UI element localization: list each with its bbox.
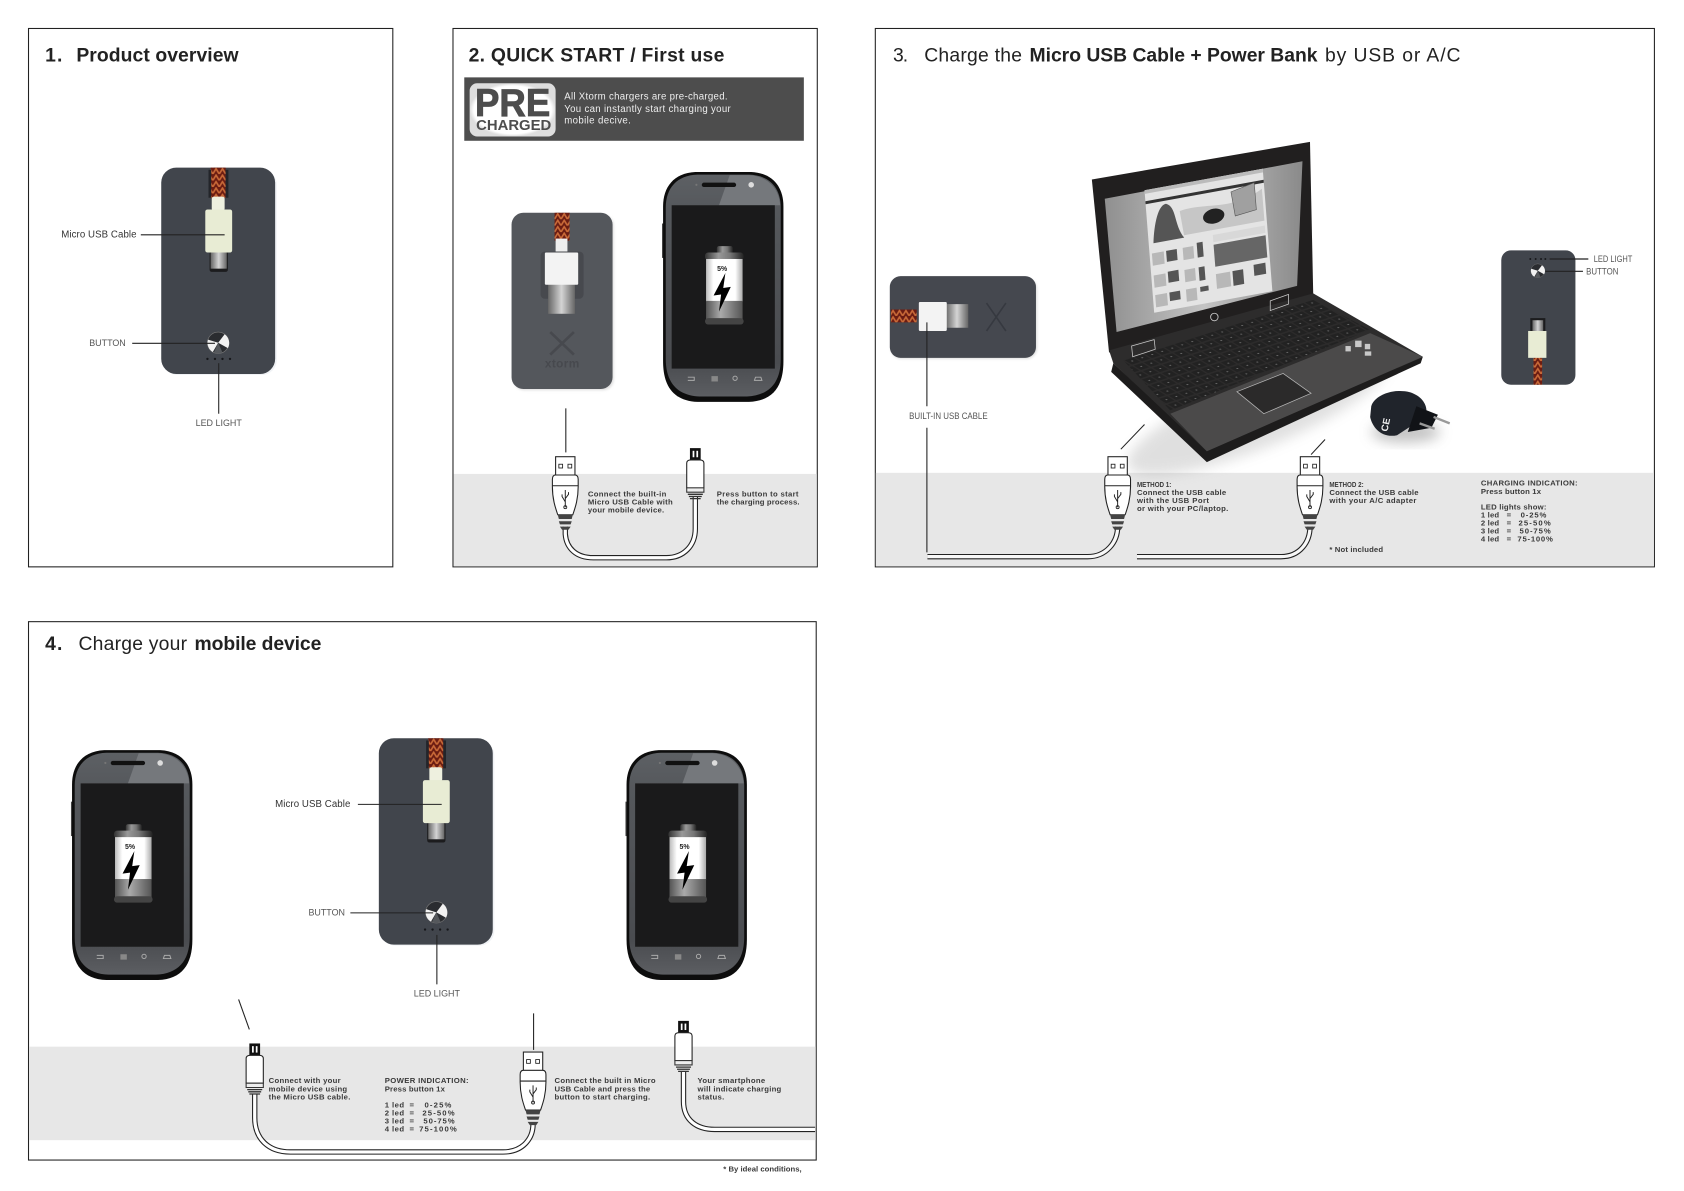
step text: smartphone status: status.	[697, 1092, 724, 1101]
text: power indication: =	[409, 1108, 414, 1117]
grey instruction band	[454, 474, 817, 566]
panel 4: charge your mobile device	[29, 622, 816, 1160]
banner text: You can instantly start charging your	[564, 104, 732, 115]
text: power indication: 75-100%	[419, 1125, 457, 1134]
badge: pre charged: PRE	[475, 82, 550, 125]
power bank front view	[161, 168, 277, 375]
heading: charge by USB or AC: Micro USB Cable + Power Bank	[1030, 44, 1318, 66]
label: button: BUTTON	[89, 338, 126, 348]
smartphone with battery screen: 5%	[717, 266, 728, 273]
step text: press button: Press button to start	[717, 489, 799, 498]
label: micro USB cable: Micro USB Cable	[275, 799, 350, 810]
heading: charge your mobile device	[45, 633, 322, 655]
text: power indication: 0-25%	[425, 1100, 452, 1109]
leader lines to connectors	[1121, 424, 1325, 455]
text: charging indication: 75-100%	[1517, 535, 1553, 544]
grey instruction band	[876, 473, 1654, 566]
label: button: BUTTON	[308, 908, 345, 918]
text: charging indication: 0-25%	[1521, 510, 1547, 519]
heading: charge your mobile device: Charge your	[78, 633, 188, 655]
smartphone, left: 5%	[125, 844, 136, 851]
label: LED light	[414, 935, 460, 999]
panel 2: quick start	[453, 28, 817, 567]
step text: connect with device	[269, 1076, 350, 1101]
cable between micro and USB-A connectors	[246, 1043, 546, 1152]
text: charging indication: 3 led	[1481, 527, 1499, 536]
text: method 1: with the USB Port	[1136, 496, 1209, 505]
text: charging indication: 25-50%	[1518, 518, 1551, 527]
text: charging indication: CHARGING INDICATION:	[1481, 479, 1578, 488]
text: power indication: 2 led	[385, 1108, 404, 1117]
text: method 2	[1328, 480, 1419, 505]
label: button	[308, 908, 433, 918]
step text: smartphone status: Your smartphone	[697, 1076, 766, 1085]
text: power indication	[385, 1076, 469, 1134]
text: charging indication	[1481, 479, 1578, 544]
text: method 2: with your A/C adapter	[1328, 496, 1416, 505]
text: charging indication: =	[1507, 510, 1512, 519]
smartphone with battery screen	[662, 172, 783, 402]
smartphone, left	[71, 750, 192, 980]
leader line to USB connector	[565, 408, 567, 452]
text: power indication: =	[409, 1100, 414, 1109]
heading: charge by USB or AC: Charge the	[924, 44, 1022, 66]
step text: connect: Micro USB Cable with	[588, 498, 673, 507]
text: power indication: 50-75%	[423, 1117, 455, 1126]
label: button (right): BUTTON	[1586, 267, 1618, 277]
heading: charge by USB or AC: by USB or A/C	[1325, 44, 1460, 66]
step text: connect built-in cable: Connect the built in Micro	[555, 1076, 656, 1085]
step text: smartphone status	[696, 1076, 782, 1101]
step text: connect with device: the Micro USB cable.	[269, 1092, 350, 1101]
label: built-in USB cable: BUILT-IN USB CABLE	[909, 411, 988, 421]
banner text	[564, 91, 732, 127]
heading: product overview: 1.	[45, 44, 62, 66]
text: charging indication: 4 led	[1481, 535, 1499, 544]
panel 1: product overview	[29, 28, 393, 567]
heading: charge by USB or AC: 3.	[893, 44, 908, 66]
text: charging indication: LED lights show:	[1481, 502, 1546, 511]
text: power indication: =	[409, 1117, 414, 1126]
banner text: All Xtorm chargers are pre-charged.	[564, 91, 728, 102]
step text: connect with device: Connect with your	[269, 1076, 341, 1085]
smartphone, right: 5%	[680, 844, 690, 851]
power bank, horizontal	[890, 276, 1037, 359]
text: method 2: METHOD 2:	[1329, 480, 1364, 489]
step text: connect: your mobile device.	[588, 506, 664, 515]
step text: press button	[717, 489, 800, 507]
step text: connect built-in cable: USB Cable and press the	[555, 1084, 651, 1093]
text: charging indication: Press button 1x	[1481, 487, 1542, 496]
heading: charge by USB or AC	[893, 44, 1460, 66]
text: power indication: 4 led	[385, 1125, 404, 1134]
grey instruction band	[29, 1047, 816, 1140]
step text: connect	[588, 489, 673, 515]
step text: connect with device: mobile device using	[269, 1084, 347, 1093]
heading: product overview: Product overview	[76, 44, 240, 66]
panel 3: charge the power bank	[875, 28, 1654, 567]
power bank, rear view	[1501, 250, 1575, 385]
power bank front view	[379, 738, 494, 946]
step text: smartphone status: will indicate charging	[696, 1084, 782, 1093]
text: power indication: POWER INDICATION:	[385, 1076, 469, 1085]
label: LED light: LED LIGHT	[196, 418, 242, 428]
label: button (right)	[1545, 267, 1618, 277]
laptop	[1092, 142, 1423, 498]
label: micro USB cable: Micro USB Cable	[61, 229, 137, 240]
text: charging indication: 1 led	[1481, 510, 1499, 519]
label: LED light: LED LIGHT	[414, 989, 460, 999]
footnote: * By ideal conditions,	[723, 1164, 802, 1173]
USB cable illustration	[552, 448, 704, 558]
label: LED light (right): LED LIGHT	[1594, 254, 1633, 264]
heading: quick start: 2. QUICK START / First use	[469, 44, 725, 66]
text: power indication: 3 led	[385, 1117, 404, 1126]
text: charging indication: =	[1507, 527, 1512, 536]
pre-charged banner	[464, 77, 804, 141]
cable from micro connector to panel edge	[675, 1021, 815, 1129]
text: power indication: Press button 1x	[385, 1084, 446, 1093]
step text: press button: the charging process.	[717, 498, 800, 507]
text: method 1: or with your PC/laptop.	[1137, 504, 1228, 513]
website on laptop screen	[1145, 169, 1272, 313]
badge: pre charged: CHARGED	[476, 118, 551, 134]
heading: charge your mobile device: mobile device	[195, 633, 322, 655]
label: button	[89, 338, 215, 348]
cable: method 2	[1137, 457, 1323, 557]
power bank with USB connector: xtorm	[545, 357, 579, 371]
leader lines to connectors	[239, 999, 534, 1050]
text: power indication: =	[409, 1125, 414, 1134]
step text: connect built-in cable	[555, 1076, 656, 1101]
smartphone, right	[625, 750, 747, 980]
text: charging indication: 50-75%	[1520, 527, 1551, 536]
step text: connect built-in cable: button to start charging.	[555, 1092, 650, 1101]
AC adapter: CE	[1380, 417, 1393, 433]
text: method 1: METHOD 1:	[1137, 480, 1171, 489]
note: not included: * Not included	[1329, 545, 1383, 554]
text: charging indication: =	[1507, 535, 1512, 544]
text: method 1	[1136, 480, 1228, 513]
text: method 2: Connect the USB cable	[1329, 488, 1419, 497]
text: charging indication: =	[1507, 518, 1512, 527]
AC adapter	[1370, 391, 1450, 443]
cable: method 1	[927, 457, 1131, 557]
heading: charge your mobile device: 4.	[45, 633, 62, 655]
label: LED light (right)	[1550, 254, 1633, 264]
button icon	[426, 902, 447, 923]
text: power indication: 25-50%	[422, 1108, 455, 1117]
power bank with USB connector	[512, 213, 614, 390]
text: method 1: Connect the USB cable	[1137, 488, 1227, 497]
step text: connect: Connect the built-in	[588, 489, 667, 498]
text: power indication: 1 led	[385, 1100, 404, 1109]
text: charging indication: 2 led	[1481, 518, 1499, 527]
label: LED light	[196, 363, 242, 428]
button icon	[207, 332, 229, 354]
banner text: mobile decive.	[564, 116, 631, 127]
